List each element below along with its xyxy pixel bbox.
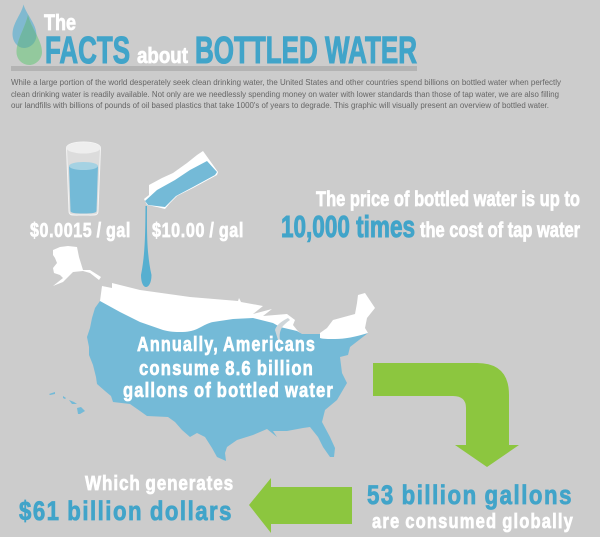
Alaska bbox=[53, 246, 101, 286]
arrow: green arrow left bbox=[249, 478, 352, 533]
map: United States filled with water bbox=[49, 246, 375, 461]
map text: gallons of bottled water bbox=[123, 380, 334, 402]
title: FACTS bbox=[45, 30, 130, 72]
lower 48 water fill bbox=[87, 301, 368, 461]
title: BOTTLED WATER bbox=[195, 30, 417, 72]
title: about bbox=[137, 43, 189, 68]
icon: tipped bottle pouring water bbox=[141, 151, 218, 287]
revenue text: $61 billion dollars bbox=[19, 496, 233, 526]
New England bbox=[320, 293, 375, 339]
Lake Michigan bbox=[275, 318, 290, 340]
intro paragraph bbox=[11, 78, 561, 110]
arrow: bent green arrow down bbox=[373, 363, 519, 467]
price comparison callout bbox=[281, 188, 580, 244]
map text: consume 8.6 billion bbox=[139, 358, 314, 380]
title bbox=[44, 10, 417, 72]
map text: Annually, Americans bbox=[137, 334, 316, 356]
Hawaii bbox=[49, 392, 85, 414]
title: The bbox=[44, 10, 76, 35]
price comparison callout: 10,000 times bbox=[281, 209, 415, 244]
price label: bottled water: $10.00 / gal bbox=[152, 220, 244, 242]
revenue text bbox=[19, 473, 234, 526]
map text bbox=[123, 334, 334, 402]
intro paragraph: our landfills with billions of pounds of oil based plastics that take 1000's of years to degrade. This graphic will visually present an overview of bottled water. bbox=[11, 101, 549, 110]
global consumption text bbox=[367, 480, 574, 533]
icon: glass of tap water bbox=[66, 142, 100, 215]
revenue text: Which generates bbox=[85, 473, 234, 495]
icon: overlapping water drops bbox=[12, 4, 42, 65]
lower 48 empty upper portion bbox=[100, 283, 302, 340]
intro paragraph: While a large portion of the world desperately seek clean drinking water, the United States and other countries spend billions on bottled water when perfectly bbox=[11, 78, 561, 87]
price label: tap water: $0.0015 / gal bbox=[30, 220, 131, 242]
intro paragraph: clean drinking water is readily available. Not only are we needlessly spending money on water with lower standards than those of tap water, we are also filling bbox=[11, 90, 559, 99]
